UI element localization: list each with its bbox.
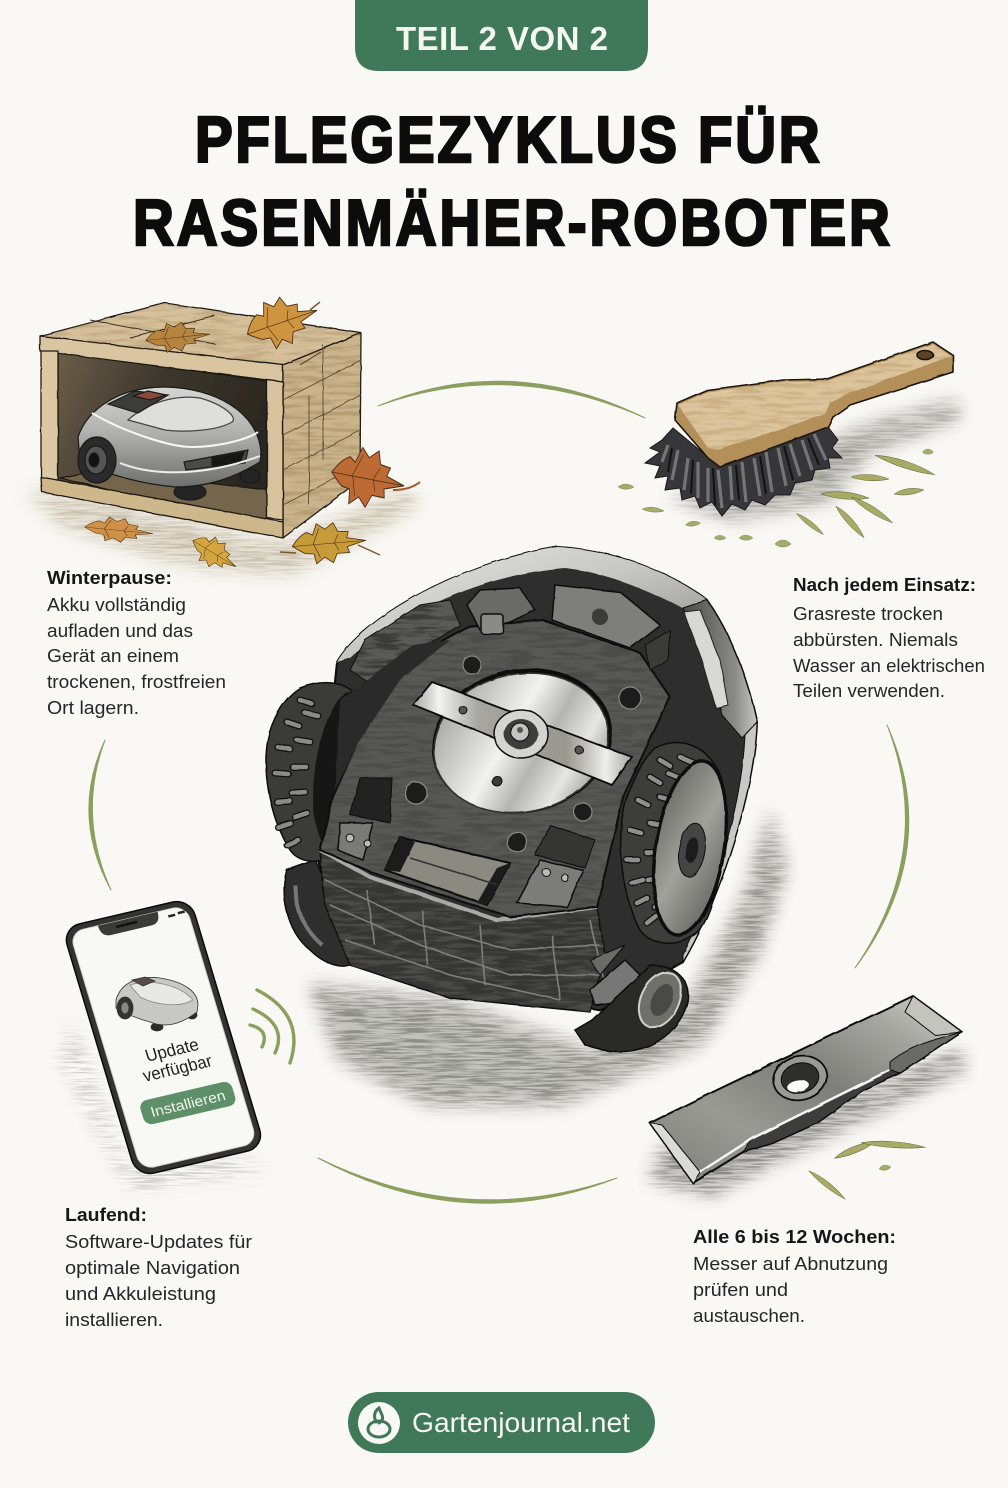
text block: Alle 6 bis 12 Wochen: Messer auf Abnutzung bbox=[693, 1253, 888, 1274]
text block: Nach jedem Einsatz: Teilen verwenden. bbox=[793, 680, 945, 701]
text block: Winterpause: Gerät an einem bbox=[47, 645, 179, 666]
underside plate bbox=[320, 620, 670, 917]
outer shell bbox=[317, 547, 757, 1010]
badge: part 2 of 2: TEIL 2 VON 2 bbox=[396, 20, 608, 57]
footer badge: Gartenjournal.net bbox=[348, 1392, 655, 1453]
battery compartment bbox=[385, 837, 510, 905]
text block: Winterpause: Akku vollständig bbox=[47, 594, 186, 615]
text block: Alle 6 bis 12 Wochen: prüfen und bbox=[693, 1279, 788, 1300]
left drive wheel bbox=[266, 683, 382, 861]
mounting holes bbox=[405, 656, 641, 852]
mini robot on screen bbox=[116, 977, 198, 1031]
text block: Laufend: installieren. bbox=[65, 1309, 163, 1330]
text block: Alle 6 bis 12 Wochen: Alle 6 bis 12 Wochen: bbox=[693, 1226, 896, 1247]
front small wheel right bbox=[590, 945, 625, 975]
illustration: winter storage box with robot bbox=[25, 287, 420, 579]
text block: Laufend bbox=[65, 1204, 252, 1330]
rear small wheel left bbox=[284, 860, 352, 966]
cycle arc: top bbox=[378, 381, 645, 418]
text block: Winterpause bbox=[47, 567, 226, 718]
phone body: Installieren bbox=[149, 1088, 228, 1121]
text block: Laufend: optimale Navigation bbox=[65, 1257, 240, 1278]
text block: Winterpause: Winterpause: bbox=[47, 567, 172, 588]
clip right bbox=[517, 860, 583, 907]
ground shadow bbox=[310, 810, 785, 1105]
cycle arc: left bbox=[89, 740, 111, 890]
mower blade with hub bbox=[413, 682, 632, 785]
autumn leaves around the box bbox=[84, 287, 420, 579]
icon: wireless signal arcs bbox=[250, 990, 294, 1063]
brush handle bbox=[675, 342, 953, 467]
bumper bbox=[320, 850, 605, 1012]
text block: Laufend: Software-Updates für bbox=[65, 1231, 252, 1252]
grass clippings by the blade bbox=[807, 1138, 925, 1201]
text block: Nach jedem Einsatz: abbürsten. Niemals bbox=[793, 629, 958, 650]
title: RASENMÄHER-ROBOTER bbox=[133, 186, 890, 259]
text block: Winterpause: trockenen, frostfreien bbox=[47, 671, 226, 692]
illustration: replacement blade bbox=[650, 996, 965, 1201]
phone body bbox=[62, 898, 265, 1177]
top brackets bbox=[467, 588, 535, 630]
right drive wheel bbox=[621, 743, 737, 943]
bristles bbox=[645, 427, 842, 516]
text block: Alle 6 bis 12 Wochen: austauschen. bbox=[693, 1305, 805, 1326]
cycle arc: bottom bbox=[318, 1158, 617, 1203]
phone body: verfügbar bbox=[140, 1051, 215, 1086]
update message: Update bbox=[143, 1034, 201, 1066]
cutting disc bbox=[418, 652, 626, 830]
text block: Alle 6 bis 12 Wochen bbox=[693, 1226, 896, 1326]
icon: sprout logo bbox=[368, 1408, 390, 1437]
grass clippings bbox=[618, 449, 936, 547]
text block: Nach jedem Einsatz: Grasreste trocken bbox=[793, 603, 943, 624]
illustration: cleaning brush bbox=[618, 342, 960, 547]
install button bbox=[138, 1080, 237, 1126]
text block: Nach jedem Einsatz: Nach jedem Einsatz: bbox=[793, 574, 976, 595]
illustration: smartphone with update screen bbox=[60, 898, 270, 1190]
robot inside the box bbox=[78, 387, 261, 500]
text block: Nach jedem Einsatz: Wasser an elektrischen bbox=[793, 655, 985, 676]
cycle arc: right bbox=[855, 725, 909, 968]
text block: Laufend: und Akkuleistung bbox=[65, 1283, 216, 1304]
text block: Winterpause: aufladen und das bbox=[47, 620, 193, 641]
badge: part 2 of 2 bbox=[355, 0, 648, 71]
title bbox=[133, 103, 890, 259]
text block: Nach jedem Einsatz bbox=[793, 574, 985, 701]
illustration: central robot mower underside bbox=[266, 547, 785, 1105]
text block: Winterpause: Ort lagern. bbox=[47, 697, 139, 718]
clip left bbox=[338, 823, 373, 860]
footer badge: Gartenjournal.net: Gartenjournal.net bbox=[412, 1407, 630, 1438]
title: PFLEGEZYKLUS FÜR bbox=[195, 103, 820, 176]
text block: Laufend: Laufend: bbox=[65, 1204, 147, 1225]
